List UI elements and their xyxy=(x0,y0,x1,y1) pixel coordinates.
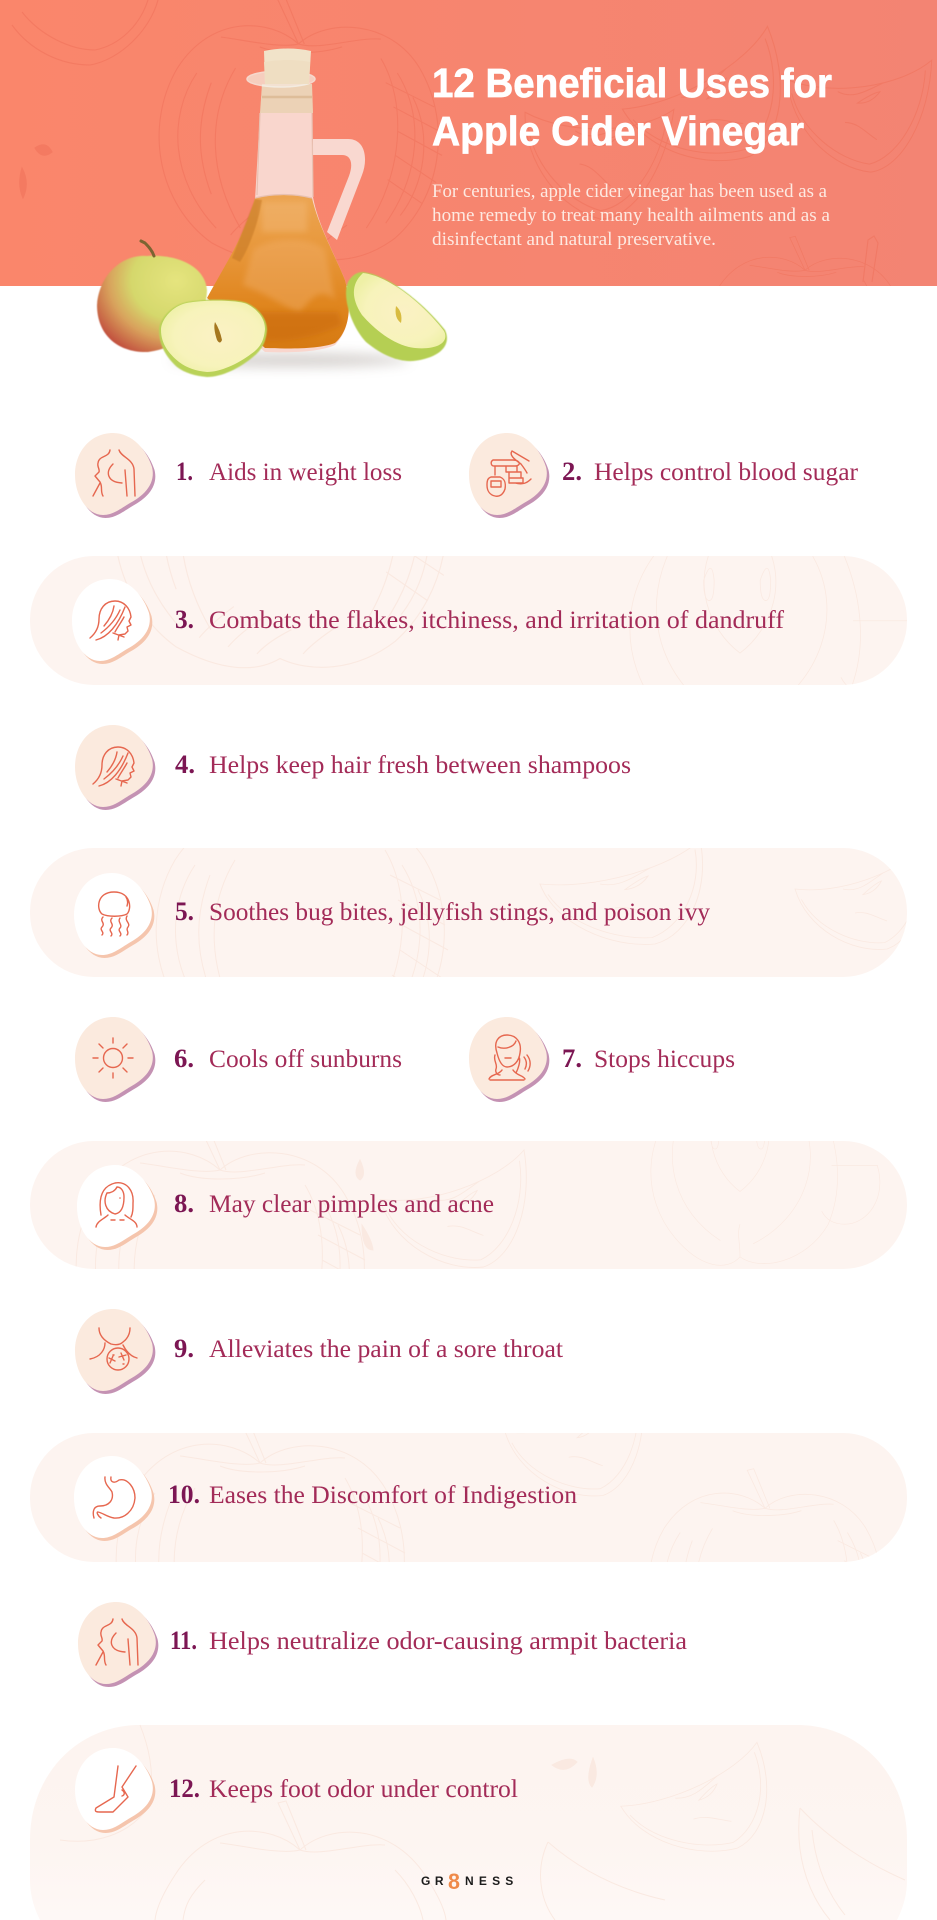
number 9: 9. xyxy=(174,1334,194,1363)
panel: header banner xyxy=(0,0,937,286)
logo: GR8NESS: GR xyxy=(421,1874,448,1888)
band: row 5 background xyxy=(30,848,907,977)
label 7: Stops hiccups xyxy=(594,1046,735,1073)
vinegar liquid xyxy=(207,195,349,348)
intro text: For centuries, apple cider vinegar has been used as a xyxy=(432,182,827,202)
glass neck collar xyxy=(260,84,313,113)
item 1 xyxy=(75,433,402,518)
number 4: 4. xyxy=(175,750,195,779)
cut apple slice xyxy=(346,272,447,361)
label 6: Cools off sunburns xyxy=(209,1046,402,1073)
item 2 xyxy=(469,433,859,518)
logo: GR8NESS: NESS xyxy=(465,1874,518,1888)
number 2: 2. xyxy=(562,457,582,486)
icon: glucose meter and hand xyxy=(469,433,549,518)
icon: hair profile xyxy=(72,579,152,664)
icon: torso and armpit xyxy=(78,1602,158,1687)
item 4 xyxy=(75,725,631,810)
number 1: 1. xyxy=(176,457,193,486)
band: row 10 background xyxy=(30,1433,907,1562)
icon: stomach xyxy=(74,1456,154,1541)
intro text: disinfectant and natural preservative. xyxy=(432,230,716,250)
number 12: 12. xyxy=(169,1774,200,1803)
heading: 12 Beneficial Uses for xyxy=(432,60,832,106)
icon: sore throat xyxy=(75,1309,155,1394)
intro text: home remedy to treat many health ailments and as a xyxy=(432,206,830,226)
number 7: 7. xyxy=(562,1044,582,1073)
label 2: Helps control blood sugar xyxy=(594,459,859,486)
label 12: Keeps foot odor under control xyxy=(209,1776,518,1803)
logo: GR8NESS xyxy=(421,1869,518,1894)
item 3 xyxy=(72,579,785,664)
number 10: 10. xyxy=(168,1480,200,1509)
apple stem xyxy=(141,241,154,256)
item 12 xyxy=(75,1748,518,1833)
label 5: Soothes bug bites, jellyfish stings, and poison ivy xyxy=(209,899,710,926)
label 4: Helps keep hair fresh between shampoos xyxy=(209,752,631,779)
label 11: Helps neutralize odor-causing armpit bacteria xyxy=(209,1628,687,1655)
number 11: 11. xyxy=(170,1626,197,1655)
photo: vinegar bottle and apples xyxy=(97,48,447,377)
label 8: May clear pimples and acne xyxy=(209,1191,494,1218)
item 11 xyxy=(78,1602,687,1687)
item 9 xyxy=(75,1309,563,1394)
cork xyxy=(264,48,311,84)
number 6: 6. xyxy=(174,1044,194,1073)
item 5 xyxy=(74,873,710,958)
bottle handle xyxy=(313,139,365,240)
number 5: 5. xyxy=(175,897,194,926)
band: row 3 background xyxy=(30,354,913,744)
heading: Apple Cider Vinegar xyxy=(432,108,804,154)
icon: woman with acne xyxy=(77,1165,157,1250)
bottle edges xyxy=(255,113,313,198)
ground shadow xyxy=(170,353,410,367)
logo: GR8NESS: 8 xyxy=(448,1869,460,1894)
whole apple xyxy=(97,256,207,352)
item 7 xyxy=(469,1017,735,1102)
cut apple half xyxy=(159,300,267,377)
item 6 xyxy=(75,1017,402,1102)
icon: sun xyxy=(75,1017,155,1102)
bottle glass xyxy=(207,113,349,352)
banner apple sketches xyxy=(12,0,932,286)
icon: foot xyxy=(75,1748,155,1833)
label 9: Alleviates the pain of a sore throat xyxy=(209,1336,563,1363)
label 10: Eases the Discomfort of Indigestion xyxy=(209,1482,577,1509)
glass lip xyxy=(247,71,315,87)
item 10 xyxy=(74,1456,577,1541)
icon: hair profile xyxy=(75,725,155,810)
band: row 12 background xyxy=(30,1725,907,1920)
number 8: 8. xyxy=(174,1189,194,1218)
icon: woman hiccup xyxy=(469,1017,549,1102)
label 3: Combats the flakes, itchiness, and irritation of dandruff xyxy=(209,607,785,634)
number 3: 3. xyxy=(175,605,194,634)
band: row 8 background xyxy=(30,1141,907,1269)
item 8 xyxy=(77,1165,494,1250)
icon: torso xyxy=(75,433,155,518)
label 1: Aids in weight loss xyxy=(209,459,402,486)
icon: jellyfish xyxy=(74,873,154,958)
